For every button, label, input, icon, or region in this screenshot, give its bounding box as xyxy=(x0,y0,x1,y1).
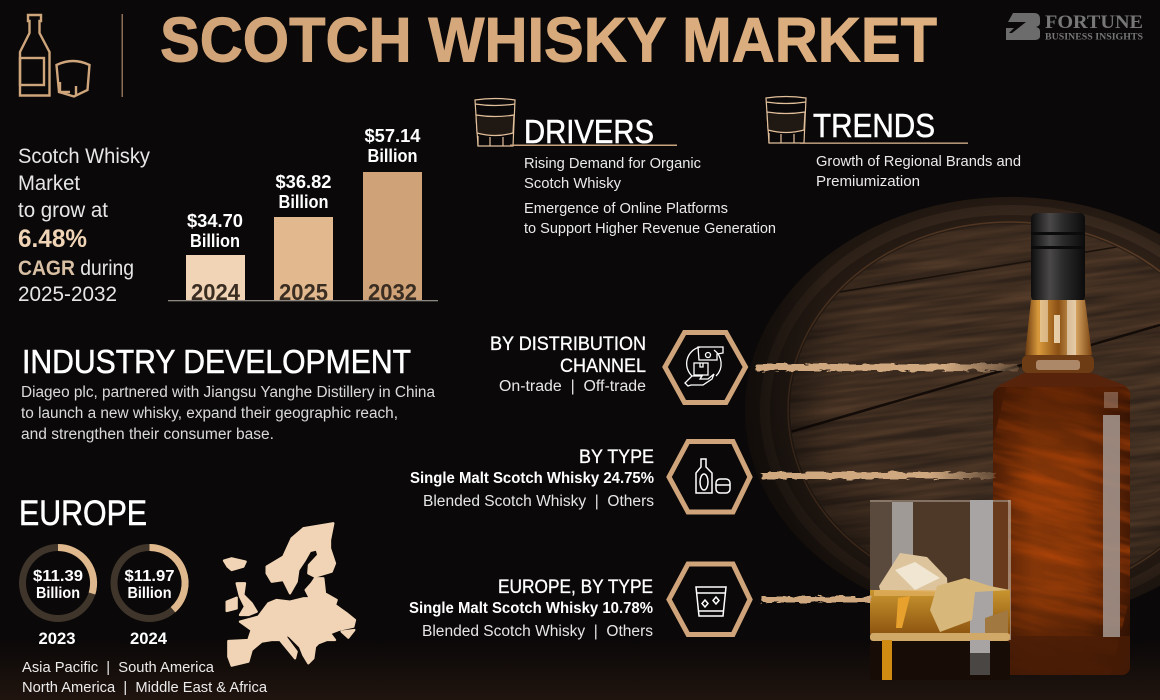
segment: by type: BY TYPE xyxy=(579,446,654,468)
segment: by distribution channel: CHANNEL xyxy=(560,355,646,377)
segment: Europe by type: Single Malt Scotch Whisky 10.78% xyxy=(409,600,653,617)
text: industry development: and strengthen their consumer base. xyxy=(21,426,274,443)
text: growth summary: to grow at xyxy=(18,199,108,222)
donut: 2023: 2023 xyxy=(38,629,76,648)
text: drivers list: to Support Higher Revenue Generation xyxy=(524,220,776,237)
bar chart: market size: Billion xyxy=(368,146,418,166)
segment: by type: Single Malt Scotch Whisky 24.75% xyxy=(410,470,654,487)
text: trends list: Growth of Regional Brands and xyxy=(816,153,1021,170)
donut: 2023: $11.39 xyxy=(33,568,83,585)
text: other regions: North America | Middle East & Africa xyxy=(22,679,268,696)
text: other regions: Asia Pacific | South America xyxy=(22,659,215,676)
icon: type hexagon xyxy=(669,442,750,512)
icon: distribution hexagon xyxy=(665,332,746,402)
text: growth summary: 6.48% xyxy=(18,225,87,253)
icon: drivers glass xyxy=(475,98,515,146)
bar chart: market size: Billion xyxy=(278,192,328,212)
text: growth summary: Scotch Whisky xyxy=(18,145,150,168)
donut: 2023 xyxy=(22,547,94,648)
segment: by distribution channel xyxy=(490,333,646,395)
logo: Fortune Business Insights: FORTUNE xyxy=(1045,12,1143,33)
text: drivers list: Rising Demand for Organic xyxy=(524,155,701,172)
brush line: Europe by type xyxy=(761,596,871,602)
logo: Fortune Business Insights: BUSINESS INSIGHTS xyxy=(1045,32,1143,42)
segment: by distribution channel: On-trade | Off-trade xyxy=(499,378,646,395)
segment: by type xyxy=(410,446,654,510)
title: SCOTCH WHISKY MARKET xyxy=(160,6,937,76)
segment: by type: Blended Scotch Whisky | Others xyxy=(423,493,654,510)
heading: trends: TRENDS xyxy=(813,107,935,144)
bar chart: market size: $36.82 xyxy=(276,172,332,192)
bar chart: market size: $34.70 xyxy=(187,211,243,231)
donut: 2023: Billion xyxy=(36,585,80,602)
bar chart: market size xyxy=(168,126,438,305)
brush line: distribution channel xyxy=(756,364,1018,371)
text: trends list xyxy=(816,153,1021,190)
bar chart: market size: 2032 xyxy=(368,279,417,305)
text: other regions xyxy=(22,659,268,696)
photo: whisky bottle xyxy=(993,213,1130,675)
map: Europe xyxy=(224,523,355,666)
text: industry development: to launch a new whisky, expand their geographic reach, xyxy=(21,405,398,422)
logo: Fortune Business Insights xyxy=(1006,12,1143,42)
text: growth summary: CAGR during xyxy=(18,257,134,280)
photo: whisky barrel xyxy=(748,197,1160,600)
text: trends list: Premiumization xyxy=(816,173,920,190)
segment: Europe by type xyxy=(409,576,653,640)
text: industry development: Diageo plc, partnered with Jiangsu Yanghe Distillery in China xyxy=(21,384,435,401)
text: drivers list: Emergence of Online Platforms xyxy=(524,200,728,217)
donut: 2024 xyxy=(114,547,185,648)
segment: by distribution channel: BY DISTRIBUTION xyxy=(490,333,646,355)
bar chart: market size: 2024 xyxy=(191,279,240,305)
divider xyxy=(122,14,123,97)
text: growth summary: Market xyxy=(18,172,80,195)
donut: 2024: Billion xyxy=(128,585,172,602)
text: growth summary xyxy=(18,145,150,306)
heading: industry development: INDUSTRY DEVELOPMENT xyxy=(22,343,411,380)
donut: 2024: $11.97 xyxy=(124,568,175,585)
bar chart: market size: $57.14 xyxy=(364,126,420,146)
donut: 2024: 2024 xyxy=(130,629,168,648)
text: industry development xyxy=(21,384,435,443)
heading: drivers: DRIVERS xyxy=(524,113,654,150)
icon: Europe glass hexagon xyxy=(669,564,750,634)
text: drivers list xyxy=(524,155,776,237)
text: drivers list: Scotch Whisky xyxy=(524,175,621,192)
icon: bottle and glass xyxy=(20,15,90,96)
icon: trends glass xyxy=(766,96,806,143)
brush line: type xyxy=(761,472,995,479)
photo: glass with ice xyxy=(870,500,1011,680)
segment: Europe by type: EUROPE, BY TYPE xyxy=(498,576,653,598)
bar chart: market size: Billion xyxy=(190,231,240,251)
segment: Europe by type: Blended Scotch Whisky | Others xyxy=(422,623,653,640)
bar chart: market size: 2025 xyxy=(279,279,328,305)
heading: Europe: EUROPE xyxy=(19,494,147,533)
text: growth summary: 2025-2032 xyxy=(18,283,117,306)
